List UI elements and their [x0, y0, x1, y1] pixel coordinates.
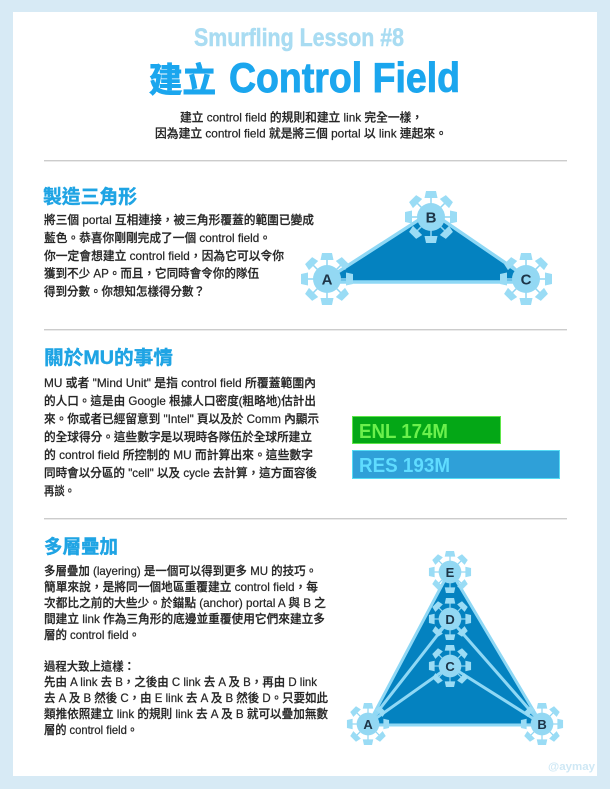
diagram: layered fields	[347, 551, 563, 745]
body text: 得到分數。你想知怎樣得分數？	[44, 284, 205, 298]
portal D: D	[445, 612, 455, 627]
body text: 獲到不少 AP。而且，它同時會令你的隊伍	[44, 266, 259, 280]
section: about MU	[44, 346, 319, 498]
body text: 去 A 及 B 然後 C，由 E link 去 A 及 B 然後 D。只要如此	[44, 690, 328, 705]
body text: 次都比之前的大些少。於錨點 (anchor) portal A 與 B 之	[44, 595, 326, 610]
portal C: C	[445, 659, 455, 674]
portal E	[429, 551, 471, 593]
links	[368, 570, 542, 725]
heading: 製造三角形	[43, 186, 137, 208]
body text	[44, 375, 319, 498]
body text: 同時會以分區的 "cell" 以及 cycle 去計算，這方面容後	[44, 465, 317, 480]
portal C: C	[521, 272, 532, 288]
title: 建立	[149, 62, 216, 100]
body text: MU 或者 "Mind Unit" 是指 control field 所覆蓋範圍內	[44, 375, 316, 390]
body text: 間建立 link 作為三角形的底邊並重覆使用它們來建立多	[44, 611, 325, 626]
portal B	[521, 703, 563, 745]
body text: 層的 control field。	[44, 627, 140, 642]
body text: 類推依照建立 link 的規則 link 去 A 及 B 就可以疊加無數	[44, 706, 328, 721]
portal C	[429, 645, 471, 687]
body text: 將三個 portal 互相連接，被三角形覆蓋的範圍已變成	[44, 212, 314, 227]
ENL score bar: ENL 174M	[359, 421, 448, 443]
body text: 藍色。恭喜你剛剛完成了一個 control field。	[44, 230, 271, 245]
body text: 簡單來說，是將同一個地區重覆建立 control field，每	[44, 579, 318, 594]
portal E: E	[446, 565, 455, 580]
portal A	[301, 253, 353, 305]
body text	[44, 563, 328, 737]
body text	[44, 212, 314, 298]
lesson label: Smurfling Lesson #8	[194, 24, 404, 52]
intro text: 建立 control field 的規則和建立 link 完全一樣，	[180, 110, 423, 124]
body text: 多層疊加 (layering) 是一個可以得到更多 MU 的技巧。	[44, 563, 317, 578]
title	[149, 54, 460, 101]
header	[149, 24, 460, 140]
body text: 先由 A link 去 B，之後由 C link 去 A 及 B，再由 D link	[44, 674, 318, 689]
portal A: A	[363, 717, 373, 732]
body text: 過程大致上這樣：	[44, 658, 135, 674]
intro text	[155, 110, 447, 140]
portal A: A	[322, 272, 333, 288]
portal C	[500, 253, 552, 305]
portal B: B	[426, 210, 437, 226]
heading: 關於MU的事情	[44, 346, 173, 369]
links	[327, 212, 526, 282]
portal D	[429, 598, 471, 640]
heading: 多層疊加	[44, 536, 118, 558]
body text: 你一定會想建立 control field，因為它可以令你	[44, 248, 284, 263]
body text: 來。你或者已經留意到 "Intel" 頁以及於 Comm 內顯示	[44, 411, 319, 426]
diagram: single field triangle	[301, 191, 552, 305]
RES score bar	[352, 450, 560, 478]
body text: 的 control field 所控制的 MU 而計算出來。這些數字	[44, 447, 313, 462]
intro text: 因為建立 control field 就是將三個 portal 以 link 連起來。	[155, 126, 447, 140]
title: Control Field	[229, 54, 460, 101]
body text: 再談。	[44, 483, 75, 498]
RES score bar: RES 193M	[359, 455, 450, 477]
body text: 層的 control field。	[44, 722, 138, 737]
section: making a triangle	[43, 186, 314, 298]
author credit: @aymay	[548, 761, 596, 773]
ENL score bar	[352, 416, 500, 444]
body text: 的全球得分。這些數字是以現時各隊伍於全球所建立	[44, 429, 312, 444]
body text: 的人口。這是由 Google 根據人口密度(粗略地)估計出	[44, 393, 316, 408]
field fill	[368, 570, 542, 725]
section: layering	[44, 536, 328, 737]
portal B	[405, 191, 457, 243]
field fill	[327, 212, 526, 282]
portal B: B	[537, 717, 547, 732]
portal A	[347, 703, 389, 745]
